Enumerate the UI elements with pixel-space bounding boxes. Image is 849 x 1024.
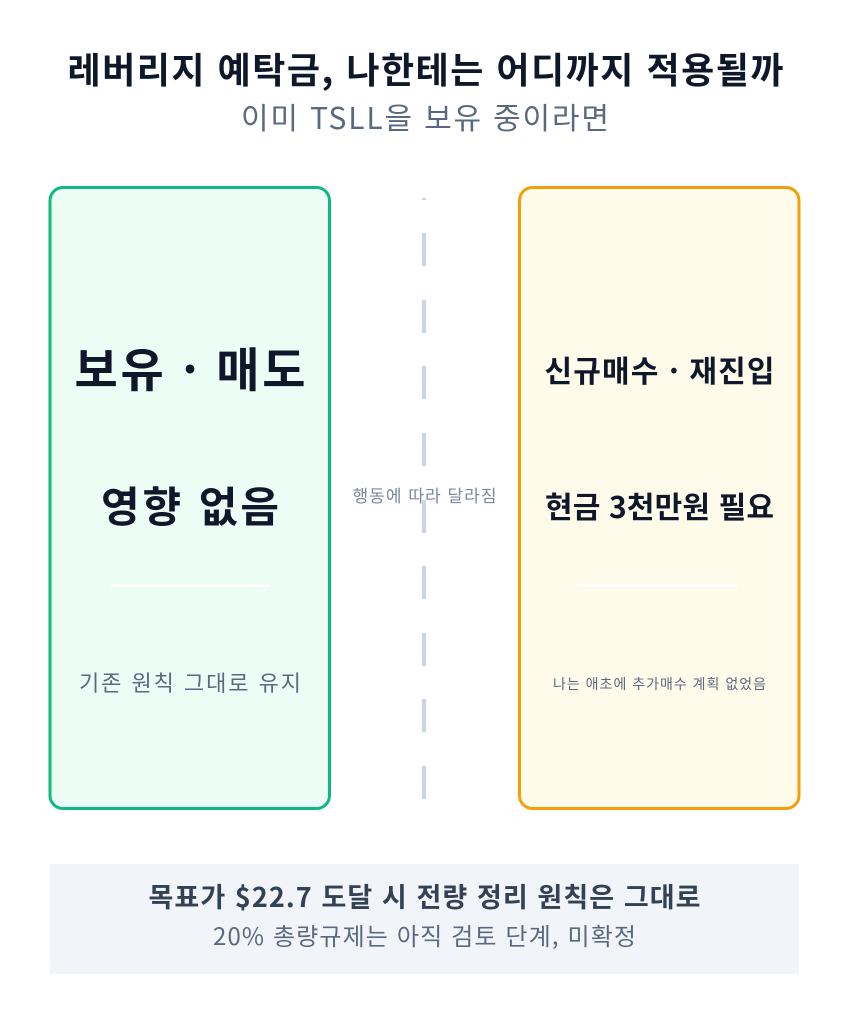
panel: no impact when holding or selling xyxy=(50,188,330,808)
panel heading: no impact: 영향 없음 xyxy=(101,474,279,535)
panel note: no plan to add: 나는 애초에 추가매수 계획 없었음 xyxy=(553,674,766,694)
panel: new buying needs cash xyxy=(520,188,799,808)
panel heading: cash requirement: 현금 3천만원 필요 xyxy=(545,483,774,527)
banner headline: 목표가 $22.7 도달 시 전량 정리 원칙은 그대로 xyxy=(148,876,700,915)
subtitle: 이미 TSLL을 보유 중이라면 xyxy=(241,94,609,138)
summary banner xyxy=(50,864,799,974)
title: 레버리지 예탁금, 나한테는 어디까지 적용될까 xyxy=(68,42,784,94)
panel heading: hold and sell: 보유 · 매도 xyxy=(74,332,306,401)
panel note: principle kept: 기존 원칙 그대로 유지 xyxy=(79,666,301,698)
divider label: 행동에 따라 달라짐 xyxy=(352,482,496,507)
dashed divider xyxy=(422,198,426,799)
banner subtext: 20% 총량규제는 아직 검토 단계, 미확정 xyxy=(213,917,636,952)
panel heading: new buy and re-entry: 신규매수 · 재진입 xyxy=(544,347,774,391)
